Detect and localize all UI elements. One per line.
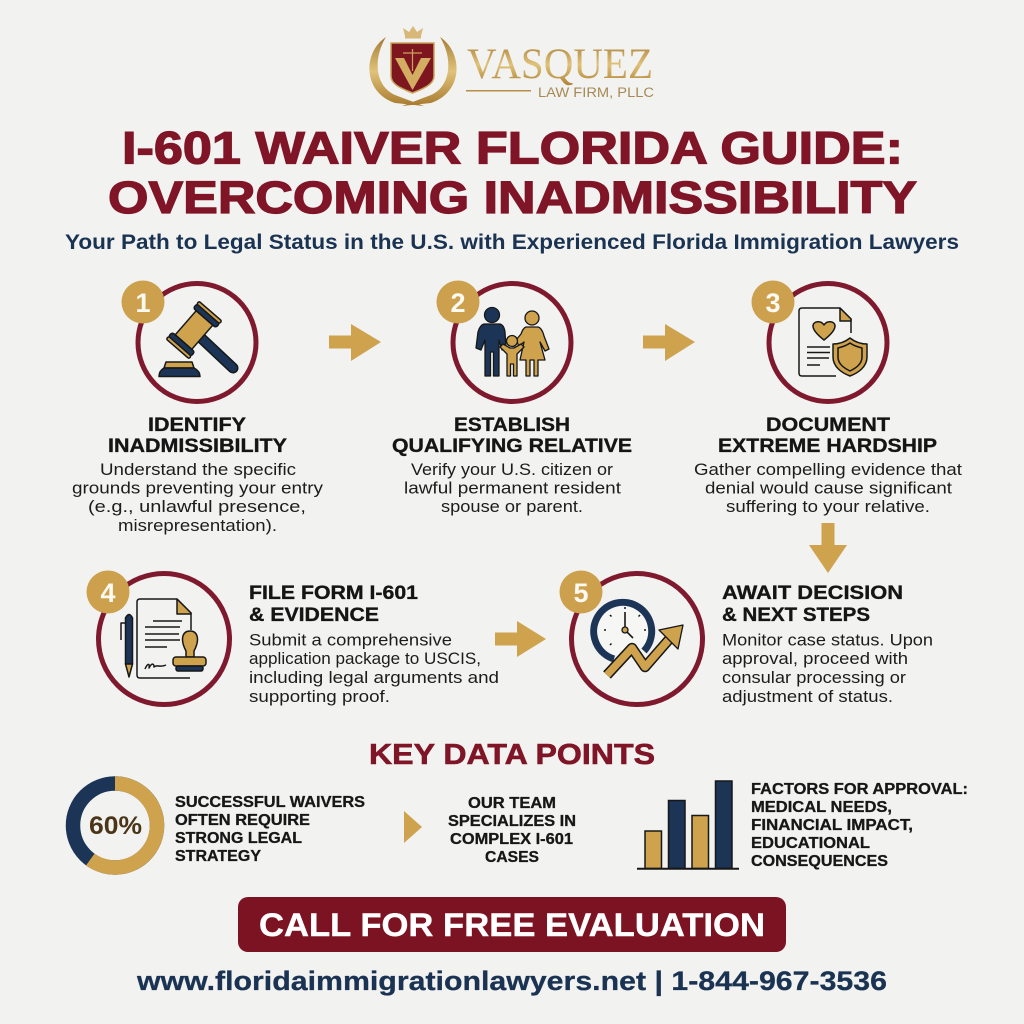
description: [72, 460, 324, 535]
data point: legal strategy: STRATEGY: [175, 848, 262, 865]
ring: [98, 574, 230, 704]
description: misrepresentation).: [118, 516, 277, 535]
data point: team: SPECIALIZES IN: [448, 813, 576, 830]
heading: ESTABLISH: [454, 414, 570, 436]
number badge: [436, 280, 480, 324]
description: consular processing or: [722, 668, 906, 687]
arrow: triangle: [404, 811, 422, 843]
heading: INADMISSIBILITY: [108, 435, 287, 457]
number badge: 4: [100, 578, 116, 608]
data point: team: COMPLEX I-601: [450, 831, 573, 848]
description: suffering to your relative.: [726, 497, 930, 516]
number badge: 5: [573, 578, 589, 608]
number badge: [752, 280, 794, 324]
wordmark: VASQUEZ: [467, 41, 653, 88]
number badge: [122, 280, 164, 324]
icon: shield: [391, 43, 434, 93]
donut chart: 60%: [73, 784, 157, 868]
step 3: document extreme hardship: [694, 280, 962, 516]
bar chart: [637, 781, 739, 869]
data point: team: [448, 795, 576, 866]
heading: EXTREME HARDSHIP: [718, 435, 937, 457]
data point: legal strategy: STRONG LEGAL: [175, 830, 302, 847]
description: adjustment of status.: [722, 687, 893, 706]
ring: [138, 284, 256, 402]
data point: factors for approval: MEDICAL NEEDS,: [751, 799, 892, 816]
arrow: step 4 to 5: [495, 621, 546, 657]
icon: gavel: [159, 301, 233, 376]
subtitle: Your Path to Legal Status in the U.S. with Experienced Florida Immigration Lawyers: [65, 230, 959, 254]
logo: Vasquez Law Firm: [369, 26, 654, 106]
icon: form, pen and stamp: [121, 599, 206, 678]
heading: [718, 414, 937, 457]
description: Monitor case status. Upon: [722, 630, 933, 650]
heading: key data points: KEY DATA POINTS: [369, 739, 655, 771]
arrow: step 2 to 3: [643, 324, 695, 361]
description: lawful permanent resident: [404, 478, 621, 498]
arrow: step 3 to 5: [809, 523, 847, 573]
title: I-601 WAIVER FLORIDA GUIDE:: [122, 122, 903, 174]
heading: [249, 582, 418, 626]
data point: factors for approval: [751, 781, 968, 870]
heading: FILE FORM I-601: [249, 582, 418, 604]
data point: team: CASES: [485, 849, 539, 866]
heading: QUALIFYING RELATIVE: [392, 435, 632, 457]
contact line: www.floridaimmigrationlawyers.net | 1-844-967-3536: [136, 966, 887, 996]
call to action button: CALL FOR FREE EVALUATION: [259, 907, 765, 943]
heading: DOCUMENT: [766, 414, 890, 436]
description: supporting proof.: [249, 687, 390, 706]
number badge: [86, 570, 130, 614]
number badge: 3: [765, 288, 781, 318]
step 1: identify inadmissibility: [72, 280, 324, 535]
data point: legal strategy: SUCCESSFUL WAIVERS: [175, 794, 365, 811]
description: including legal arguments and: [249, 668, 499, 687]
data point: factors for approval: FINANCIAL IMPACT,: [751, 817, 913, 834]
number badge: 2: [450, 288, 466, 318]
donut chart: 60%: 60%: [89, 812, 142, 840]
icon: crown: [403, 26, 423, 38]
description: [722, 630, 933, 706]
data point: legal strategy: [175, 794, 365, 865]
description: [249, 630, 499, 706]
description: Submit a comprehensive: [249, 630, 452, 650]
description: Gather compelling evidence that: [694, 460, 962, 479]
icon: document with heart and shield: [799, 308, 867, 376]
number badge: [560, 570, 602, 614]
data point: legal strategy: OFTEN REQUIRE: [175, 812, 310, 829]
ring: [769, 284, 887, 402]
description: application package to USCIS,: [249, 649, 481, 668]
data point: factors for approval: EDUCATIONAL: [751, 835, 870, 852]
heading: & NEXT STEPS: [722, 604, 870, 626]
data point: factors for approval: CONSEQUENCES: [751, 853, 888, 870]
data point: team: OUR TEAM: [468, 795, 556, 812]
step 4: file form I-601 and evidence: [86, 570, 499, 706]
heading: [392, 414, 632, 457]
description: grounds preventing your entry: [72, 478, 324, 498]
description: (e.g., unlawful presence,: [88, 497, 306, 516]
description: Understand the specific: [100, 460, 297, 479]
icon: clock with rising arrow: [594, 602, 683, 675]
tagline: LAW FIRM, PLLC: [538, 85, 654, 100]
title: [108, 122, 917, 223]
description: denial would cause significant: [705, 478, 952, 498]
heading: [108, 414, 287, 457]
number badge: 1: [135, 288, 151, 318]
heading: AWAIT DECISION: [722, 582, 903, 604]
ring: [572, 574, 702, 704]
title: OVERCOMING INADMISSIBILITY: [108, 172, 917, 223]
description: [694, 460, 962, 516]
data point: factors for approval: FACTORS FOR APPROVAL:: [751, 781, 968, 798]
icon: right laurel: [402, 37, 457, 106]
ring: [453, 284, 571, 402]
heading: [722, 582, 903, 626]
description: Verify your U.S. citizen or: [411, 460, 613, 479]
heading: & EVIDENCE: [249, 604, 379, 626]
description: spouse or parent.: [441, 497, 583, 516]
icon: family: [476, 308, 549, 376]
step 2: establish qualifying relative: [392, 280, 632, 516]
description: [404, 460, 621, 516]
step 5: await decision and next steps: [560, 570, 933, 706]
call to action button: [238, 897, 786, 952]
heading: IDENTIFY: [148, 414, 246, 436]
icon: left laurel: [369, 37, 424, 106]
arrow: step 1 to 2: [329, 324, 381, 361]
description: approval, proceed with: [722, 649, 908, 668]
